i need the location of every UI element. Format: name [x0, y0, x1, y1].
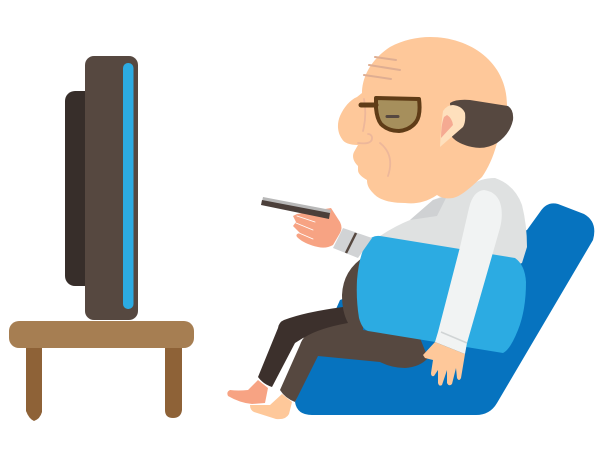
armchair [295, 203, 594, 415]
glasses [361, 98, 420, 131]
near sleeve [435, 190, 502, 354]
torso [380, 178, 527, 300]
ear [440, 105, 465, 147]
head [338, 37, 507, 203]
forearm sleeve [333, 228, 372, 258]
man [227, 37, 527, 419]
forehead wrinkles [364, 57, 400, 79]
collar shadow [410, 196, 447, 220]
pillow [357, 236, 526, 353]
remote control [261, 197, 331, 219]
near foot [250, 394, 292, 419]
finger gaps [296, 216, 315, 239]
lower hand [423, 342, 465, 386]
inner ear [441, 115, 453, 138]
nose and cheek lines [358, 99, 390, 176]
cuff line [441, 332, 467, 343]
hair [450, 100, 513, 148]
sleeve band [346, 233, 356, 253]
far foot [227, 380, 268, 404]
table [9, 321, 194, 421]
remote hand [293, 208, 342, 248]
far leg [258, 307, 350, 387]
belly and near leg [280, 256, 428, 402]
television [65, 56, 138, 320]
